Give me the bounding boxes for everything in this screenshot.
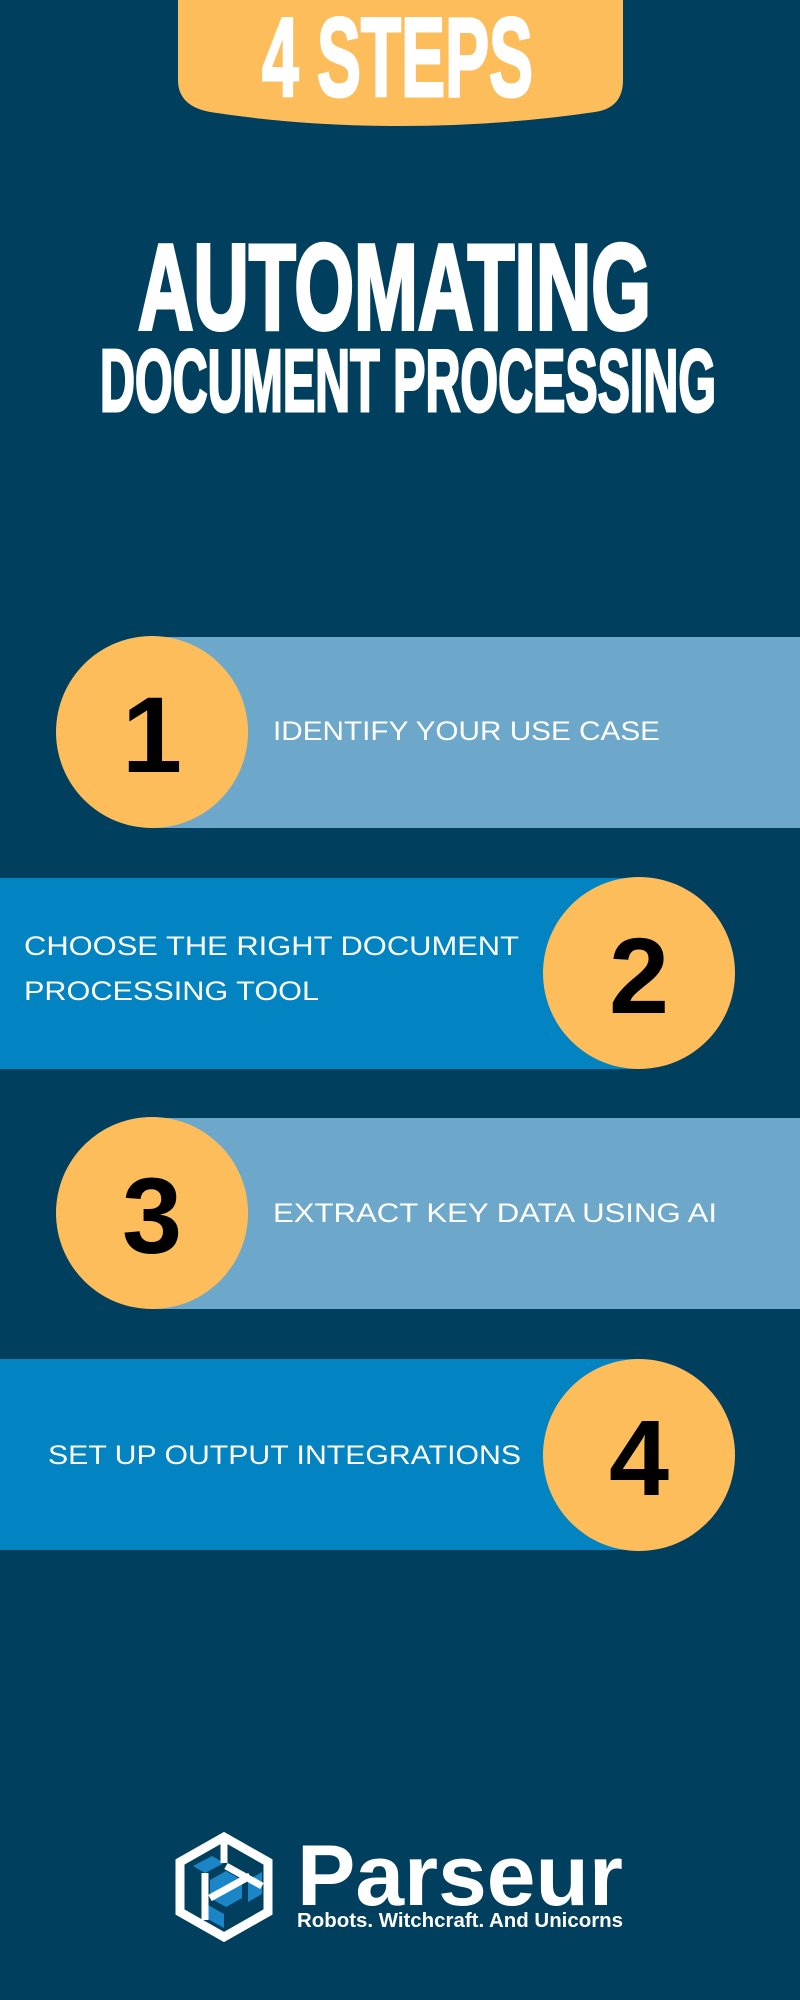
step 2 text: CHOOSE THE RIGHT DOCUMENT	[24, 931, 519, 961]
title	[100, 219, 716, 430]
logo	[180, 1828, 623, 1937]
icon: parseur hexagon	[180, 1837, 268, 1937]
number circle 3: 3	[122, 1155, 182, 1276]
number circle 4: 4	[609, 1397, 669, 1518]
number circle 1	[56, 636, 248, 828]
step 2 text: PROCESSING TOOL	[24, 976, 319, 1006]
tagline: Robots. Witchcraft. And Unicorns	[297, 1910, 623, 1932]
number circle 2: 2	[609, 915, 669, 1036]
number circle 2	[543, 877, 735, 1069]
step 3	[56, 1117, 800, 1309]
step 4 text: SET UP OUTPUT INTEGRATIONS	[48, 1440, 521, 1470]
header tab: 4 steps	[178, 0, 623, 126]
number circle 4	[543, 1359, 735, 1551]
number circle 1: 1	[122, 674, 182, 795]
brand name: Parseur	[297, 1828, 623, 1924]
step 4	[0, 1359, 735, 1551]
step 1 text: IDENTIFY YOUR USE CASE	[273, 716, 660, 746]
step 3 text: EXTRACT KEY DATA USING AI	[273, 1198, 717, 1228]
step 2 text	[24, 931, 519, 1006]
number circle 3	[56, 1117, 248, 1309]
step 2	[0, 877, 735, 1069]
step 1	[56, 636, 800, 828]
